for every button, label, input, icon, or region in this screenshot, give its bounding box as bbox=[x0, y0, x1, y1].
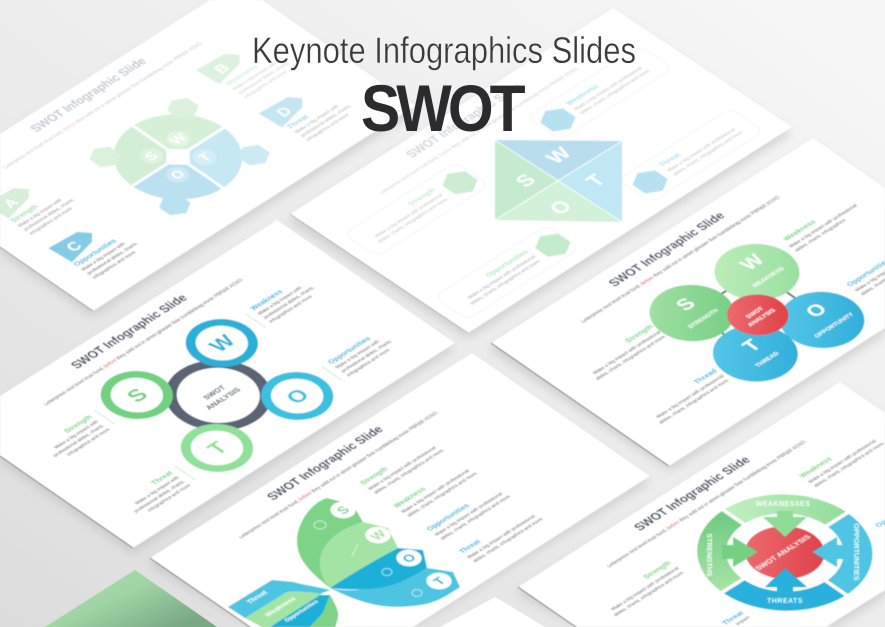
badge W: W bbox=[367, 527, 390, 543]
slide 2 text and cards: Strength bbox=[405, 186, 438, 207]
slide 2 text and cards: slides, charts, infographics and more. bbox=[672, 129, 746, 177]
threat text: infographics and more bbox=[146, 483, 193, 513]
threat text: Make a big impact with bbox=[293, 104, 341, 134]
circle W bbox=[171, 309, 273, 377]
slide 2 text and cards: Threat bbox=[657, 151, 683, 168]
envelope diagram: W bbox=[541, 144, 577, 167]
weakness text: Weakness bbox=[797, 455, 834, 479]
ring labels bbox=[705, 501, 859, 605]
slide 4 subtitle: Letterpress next level trust fund, before they sold out in street glossier fixie humblebrag ironic PBR&B XOXO. bbox=[43, 277, 246, 407]
strength text: Make a big impact with professional bbox=[592, 330, 663, 376]
panel: slide 2 envelope bbox=[290, 8, 792, 333]
slide 2 text and cards: Opportunities bbox=[483, 248, 530, 279]
circle O: O bbox=[801, 300, 832, 321]
slide 6 content bbox=[554, 402, 885, 627]
circle O: O bbox=[281, 385, 315, 408]
circle W: WEAKNESS bbox=[751, 266, 786, 289]
weakness text: professional slides, charts, bbox=[262, 285, 316, 320]
threat text: professional slides, charts, bbox=[133, 479, 187, 514]
thread text bbox=[643, 367, 732, 425]
thread text: Make a big impact with professional bbox=[655, 374, 726, 419]
ribbon threat bbox=[228, 580, 330, 618]
slide 2 sheet bbox=[290, 8, 792, 333]
slide 2 edge bbox=[290, 214, 468, 333]
ribbon green base bbox=[310, 595, 338, 627]
slide 2 text and cards: slides, charts, infographics and more. bbox=[377, 197, 451, 244]
slide 4 content bbox=[0, 245, 414, 523]
puzzle diagram: W bbox=[167, 131, 191, 147]
slide 5 text: Make a big impact with professional bbox=[400, 469, 471, 514]
opportunities text: infographics and more bbox=[346, 348, 392, 378]
weakness text: Make a big impact with bbox=[257, 286, 304, 316]
slide 5 text: SWOT Infographic Slide bbox=[264, 424, 386, 502]
threat text: Make a big impact with bbox=[134, 475, 181, 506]
ribbon opportunities: Opportunities bbox=[284, 600, 320, 623]
circle S: STRENGTH bbox=[686, 307, 721, 330]
strength text: Strength bbox=[8, 203, 40, 224]
strength text: Strength bbox=[641, 559, 673, 580]
ribbon threat: Threat bbox=[246, 590, 270, 605]
slide 5 text: slides, charts, infographics and more. bbox=[373, 448, 447, 495]
slide 5 edge bbox=[150, 558, 250, 627]
ribbon opportunities bbox=[270, 595, 330, 627]
ring labels: STRENGTHS bbox=[705, 533, 712, 577]
slide 1 subtitle: Letterpress next level trust fund, before they sold out in street glossier fixie humblebrag ironic PBR&B XOXO. bbox=[2, 41, 205, 170]
circle O: OPPORTUNITY bbox=[813, 312, 856, 339]
slide 2 text and cards: Make a big impact with professional bbox=[374, 193, 445, 238]
centre red circle bbox=[714, 286, 801, 344]
circle T bbox=[166, 414, 268, 482]
arrows to centre bbox=[722, 511, 848, 594]
slide 6 sheet bbox=[518, 382, 885, 627]
petal W bbox=[320, 522, 398, 588]
slide 2 text and cards: slides, charts, infographics and more. bbox=[469, 259, 543, 306]
tag C: C bbox=[63, 239, 86, 255]
slide 5 text: Make a big impact with professional bbox=[434, 492, 505, 537]
circle T bbox=[695, 314, 815, 393]
strength text: professional slides, charts, bbox=[22, 198, 76, 232]
slide 4 edge bbox=[0, 456, 133, 548]
slide 3 title: SWOT Infographic Slide bbox=[605, 210, 728, 289]
slide 1 title: SWOT Infographic Slide bbox=[27, 56, 150, 134]
weakness text: Weakness bbox=[223, 63, 260, 87]
slide 5 text: slides, charts, infographics and more. bbox=[472, 516, 546, 564]
opportunities text: professional slides, charts, bbox=[340, 339, 394, 374]
circle T: T bbox=[738, 336, 766, 356]
panel: slide 3 overlapping circles bbox=[491, 138, 885, 466]
slide 5 text: Threat bbox=[457, 538, 483, 555]
weakness text bbox=[797, 430, 885, 488]
slide 5 text: slides, charts, infographics and more. bbox=[406, 471, 480, 518]
slide 5 text: slides, charts, infographics and more. bbox=[439, 494, 513, 541]
weakness text: slides, charts, infographics bbox=[794, 218, 848, 253]
strength text: professional slides, charts, bbox=[52, 423, 106, 458]
slide 6 edge bbox=[518, 587, 576, 627]
circle T: T bbox=[202, 438, 233, 459]
slide 3 sheet bbox=[491, 138, 885, 466]
opportunities text bbox=[325, 329, 400, 378]
opportunities text: Opportunities bbox=[71, 237, 119, 268]
strength text: Strength bbox=[62, 413, 94, 435]
strength text bbox=[37, 413, 112, 462]
heading: Keynote Infographics Slides bbox=[252, 30, 636, 71]
strength text: slides, charts, infographics and more. bbox=[612, 570, 687, 618]
connector square bbox=[692, 271, 820, 356]
puzzle diagram: O bbox=[167, 167, 189, 182]
central ring: SWOT bbox=[201, 384, 228, 401]
tag B: B bbox=[211, 61, 234, 77]
circle W: W bbox=[204, 331, 241, 356]
circle O bbox=[762, 280, 882, 360]
threat text: infographics and more bbox=[305, 113, 351, 142]
slide 5 text: Weakness bbox=[391, 485, 428, 509]
threat text: professional slides, charts, bbox=[299, 104, 353, 138]
opportunities text: professional slides, charts, bbox=[86, 241, 140, 276]
tag A bbox=[0, 183, 41, 219]
slide 1 content bbox=[0, 9, 360, 281]
slide 6 subtitle: Letterpress next level trust fund, before they sold out in street glossier fixie humblebrag ironic PBR&B XOXO. bbox=[606, 439, 809, 569]
strength text: Strength bbox=[623, 323, 655, 344]
envelope diagram bbox=[495, 140, 622, 222]
slide 2 text and cards bbox=[310, 22, 764, 320]
weakness text: infographics and more bbox=[243, 70, 289, 99]
slide 5 text: Opportunities bbox=[424, 502, 472, 532]
envelope diagram: S bbox=[511, 170, 541, 191]
slide 1 edge bbox=[0, 247, 93, 311]
slide 3 subtitle: Letterpress next level trust fund, before they sold out in street glossier fixie humblebrag ironic PBR&B XOXO. bbox=[580, 195, 783, 324]
threat text: Threat bbox=[720, 609, 746, 626]
weakness text bbox=[778, 197, 865, 253]
strength text bbox=[8, 187, 82, 236]
opportunities text: infographics and more bbox=[91, 250, 138, 280]
threat text bbox=[118, 469, 193, 518]
ring quadrants bbox=[661, 470, 885, 627]
separators bbox=[94, 314, 347, 480]
circle W bbox=[697, 232, 817, 312]
strength text: slides, charts, infographics and more. bbox=[594, 334, 668, 381]
circle W: W bbox=[735, 251, 770, 274]
tag B bbox=[196, 48, 252, 85]
thread text: slides, charts, infographics and more. bbox=[658, 378, 732, 425]
ribbon weakness: Weakness bbox=[264, 596, 298, 618]
weakness text: Make a big impact with professional bbox=[807, 439, 878, 484]
slide 1 sheet bbox=[0, 0, 415, 311]
puzzle diagram: S bbox=[141, 150, 161, 163]
slide 5 text: Letterpress next level trust fund, before they sold out in street glossier fixie humblebrag ironic PBR&B XOXO. bbox=[238, 410, 441, 540]
thread text: Thread bbox=[691, 367, 719, 385]
opportunities text bbox=[71, 231, 146, 280]
panel: slide 1 circular puzzle bbox=[0, 0, 415, 311]
centre red circle: ANALYSIS bbox=[746, 308, 778, 328]
envelope diagram: T bbox=[581, 171, 611, 191]
strength text bbox=[597, 559, 687, 618]
panel: slide 4 ring diagram bbox=[0, 220, 455, 548]
petal S bbox=[297, 498, 363, 588]
main title: SWOT bbox=[361, 72, 525, 146]
icons bbox=[314, 521, 422, 596]
opportunities text: Make a big impact with bbox=[334, 339, 382, 370]
badge O: O bbox=[399, 551, 420, 565]
ring labels: WEAKNESSES bbox=[756, 501, 810, 508]
ribbon weakness bbox=[245, 592, 322, 627]
panel: white slide bottom centre bbox=[440, 597, 545, 627]
strength text: infographics and more bbox=[66, 427, 112, 457]
opportunities text: Make a big impact with bbox=[80, 242, 128, 272]
tag D bbox=[259, 92, 315, 129]
strength text bbox=[579, 323, 668, 381]
weakness text: Weakness bbox=[781, 218, 818, 242]
slide 2 text and cards: SWOT Infographic Slide bbox=[403, 81, 525, 160]
puzzle diagram bbox=[84, 92, 275, 220]
slide 5 sheet bbox=[150, 353, 650, 627]
slide 5 text: Make a big impact with professional bbox=[466, 514, 537, 560]
petal T bbox=[330, 568, 460, 607]
panel: green slide bottom-left bbox=[45, 570, 217, 627]
envelope diagram: O bbox=[545, 197, 577, 219]
strength text: infographics and more bbox=[28, 206, 74, 236]
centre red circle: SWOT bbox=[744, 306, 766, 320]
badge T bbox=[421, 569, 457, 593]
weakness text: Make a big impact with professional bbox=[788, 203, 859, 249]
slide 3 content bbox=[526, 161, 885, 444]
strength text: Make a big impact with bbox=[17, 198, 64, 228]
weakness text bbox=[248, 275, 322, 324]
petal O bbox=[330, 548, 427, 590]
slide 2 text and cards: slides, charts, infographics and more. bbox=[579, 68, 653, 115]
central ring: ANALYSIS bbox=[203, 386, 243, 411]
strength text: Make a big impact with bbox=[53, 419, 101, 450]
badge S: S bbox=[333, 503, 353, 517]
badge T: T bbox=[430, 575, 449, 587]
ring labels: THREATS bbox=[767, 598, 803, 605]
circle S: S bbox=[121, 385, 153, 406]
circle S bbox=[86, 361, 188, 429]
strength text: Make a big impact with professional bbox=[610, 566, 681, 612]
badge O bbox=[391, 546, 427, 570]
central ring bbox=[143, 345, 294, 445]
circle S: S bbox=[671, 295, 701, 315]
circle O bbox=[246, 362, 348, 430]
slide 5 text: Strength bbox=[358, 465, 390, 486]
weakness text: Weakness bbox=[248, 288, 285, 312]
ring labels: SWOT ANALYSIS bbox=[753, 533, 813, 572]
tag D: D bbox=[273, 104, 296, 120]
circle T: THREAD bbox=[754, 351, 782, 368]
weakness text: professional slides, charts, bbox=[237, 61, 291, 96]
threat text: Threat bbox=[149, 469, 175, 486]
panel: slide 5 butterfly diagram bbox=[150, 353, 650, 627]
opportunities text: Opportunities bbox=[325, 335, 373, 365]
weakness text: infographics and more bbox=[268, 294, 314, 324]
tag A: A bbox=[0, 195, 23, 211]
slide 4 sheet bbox=[0, 220, 455, 548]
ring labels: OPPORTUNITIES bbox=[852, 523, 859, 581]
slide 2 text and cards: Weakness bbox=[563, 83, 601, 107]
puzzle diagram: T bbox=[195, 151, 215, 164]
tag C bbox=[48, 226, 104, 263]
weakness text: slides, charts, infographics and more. bbox=[813, 441, 885, 488]
slide 2 text and cards: Make a big impact with professional bbox=[466, 255, 537, 300]
weakness text: Make a big impact with bbox=[231, 61, 279, 92]
weakness text bbox=[223, 51, 297, 99]
slide 6 title: SWOT Infographic Slide bbox=[631, 454, 753, 533]
threat text bbox=[285, 94, 359, 142]
slide 4 title: SWOT Infographic Slide bbox=[68, 292, 190, 371]
slide 2 text and cards: Make a big impact with professional bbox=[666, 127, 737, 173]
slide 2 text and cards: Make a big impact with professional bbox=[573, 66, 644, 112]
threat text: impact bbox=[735, 615, 752, 626]
slide 5 text bbox=[219, 397, 571, 627]
badge W bbox=[360, 523, 396, 547]
slide 5 text: Make a big impact with professional bbox=[367, 446, 438, 491]
badge S bbox=[325, 498, 361, 522]
slide 2 text and cards: Letterpress next level trust fund, before they sold out in street glossier fixie humblebrag ironic PBR&B XOXO. bbox=[378, 66, 581, 196]
threat text: Threat bbox=[285, 113, 311, 130]
circle S bbox=[632, 273, 752, 353]
panel: slide 6 circular arrows bbox=[518, 382, 885, 627]
slide 3 edge bbox=[491, 343, 669, 466]
